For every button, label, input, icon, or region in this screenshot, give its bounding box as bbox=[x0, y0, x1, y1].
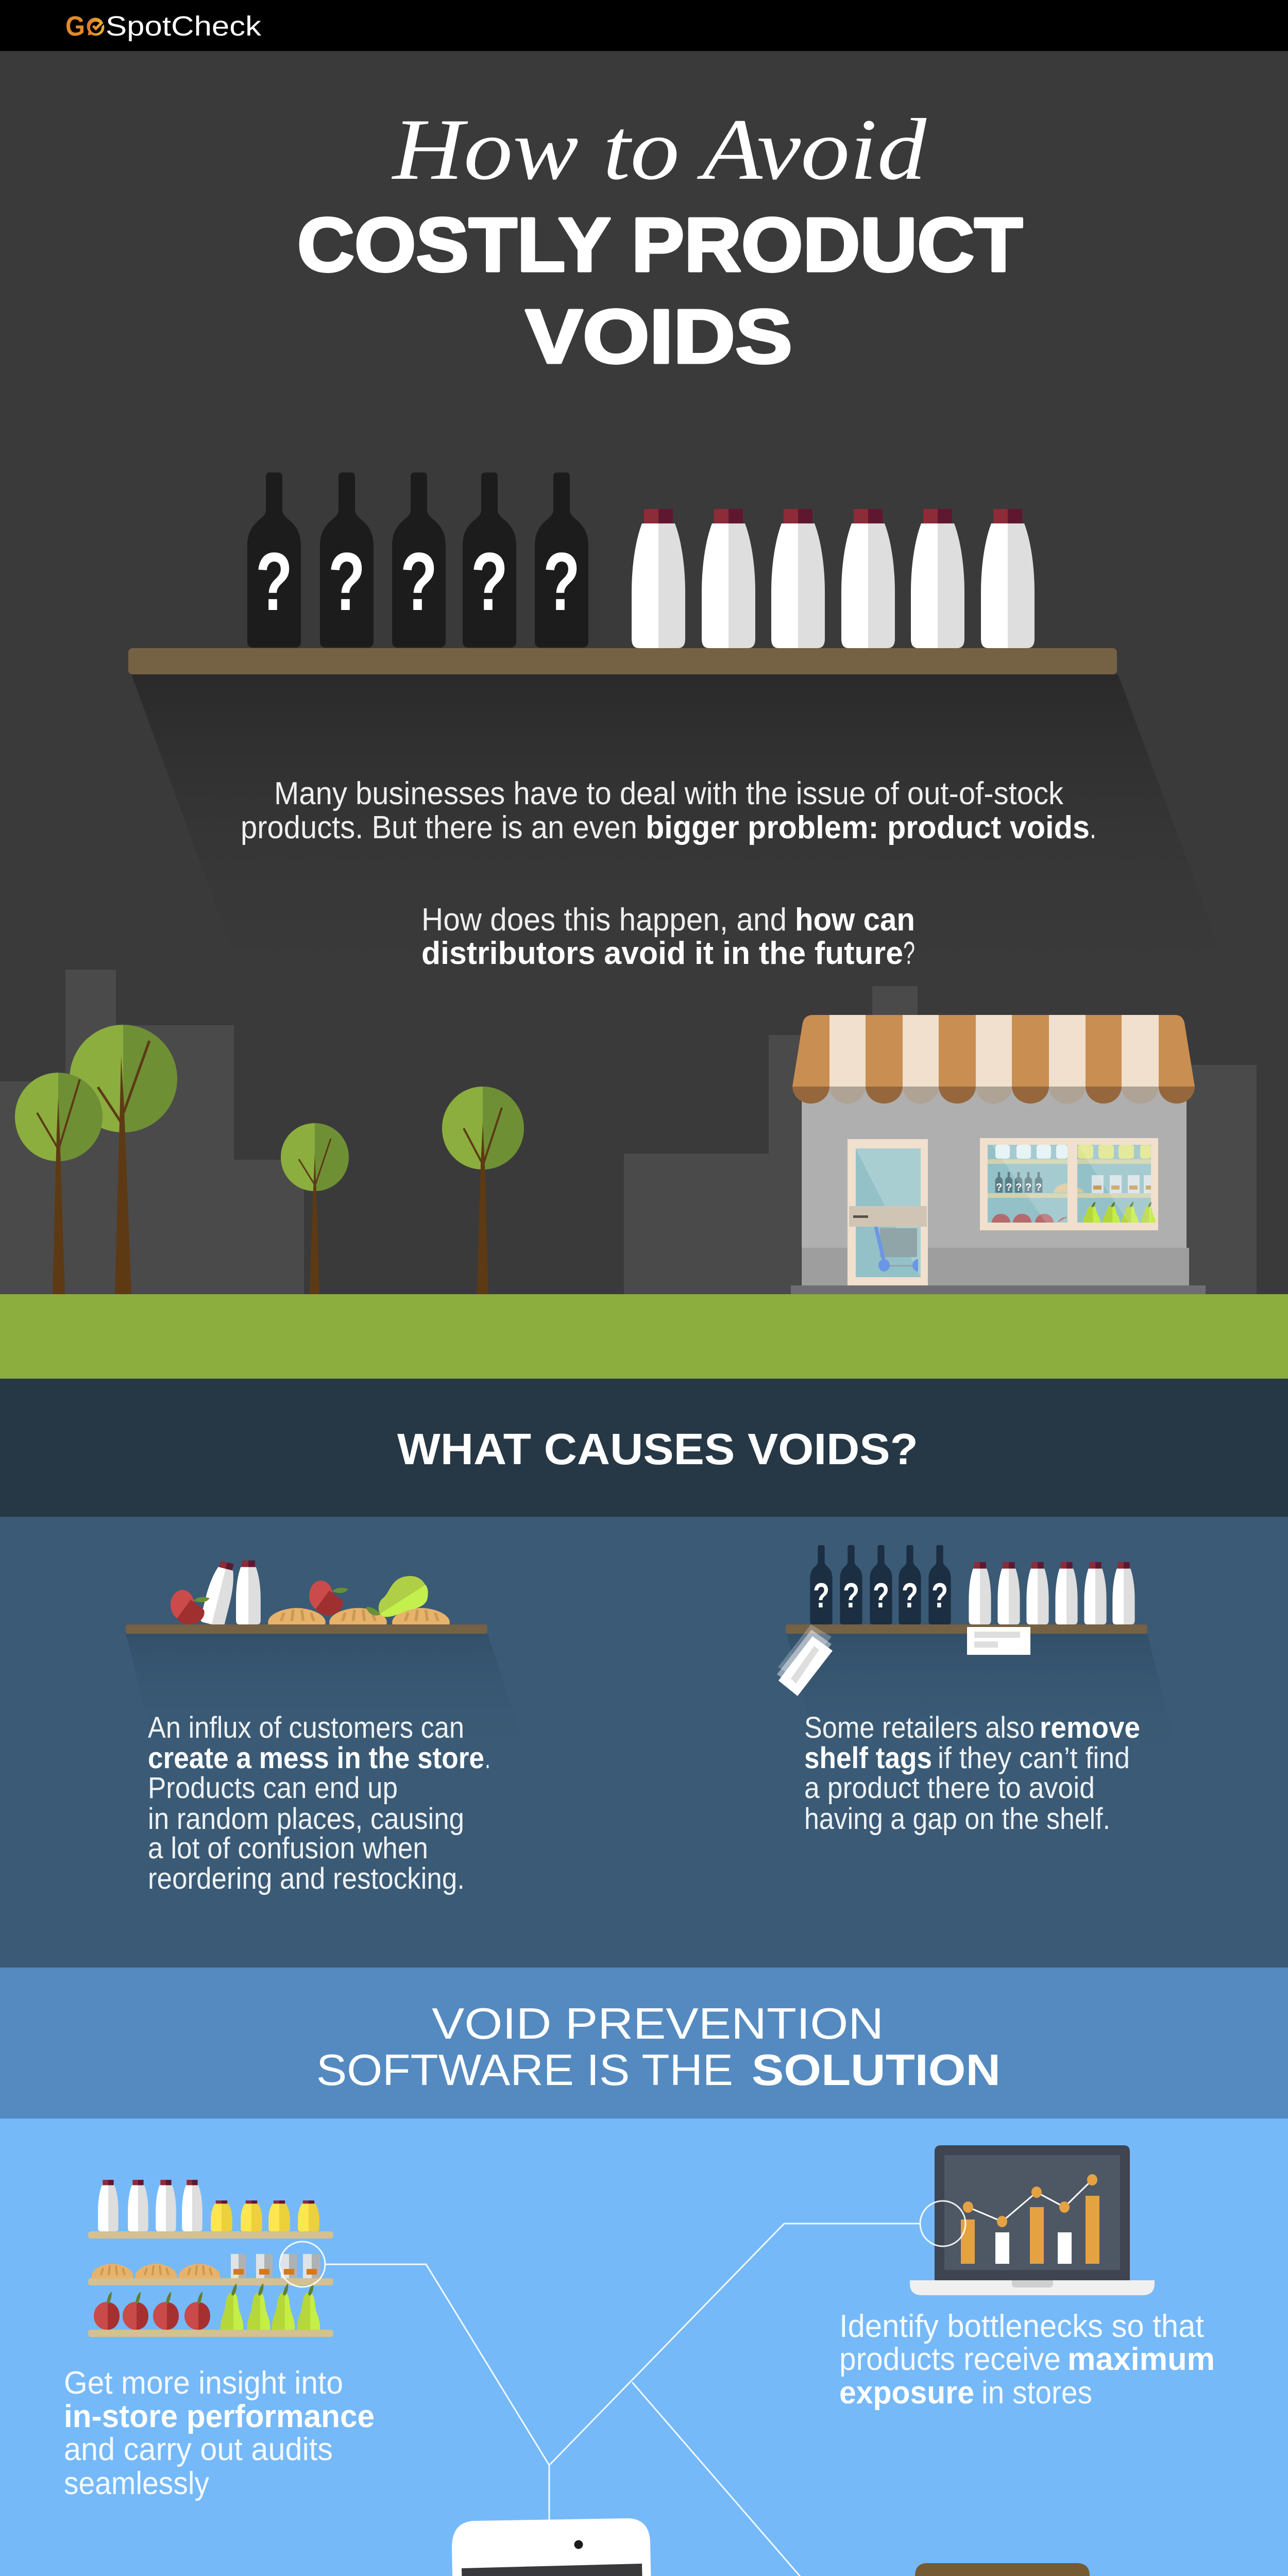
dark unknown bottles: ? bbox=[471, 535, 508, 628]
phone camera bbox=[574, 2540, 583, 2549]
phone bbox=[452, 2518, 658, 2576]
intro text: bigger problem: product voids bbox=[646, 810, 1090, 845]
intro text: Many businesses have to deal with the issue of out-of-stock bbox=[274, 776, 1064, 811]
city skyline bbox=[0, 970, 1257, 1294]
messy shelf items bbox=[171, 1560, 450, 1628]
hero shelf bbox=[128, 648, 1117, 674]
question text: How does this happen, and bbox=[421, 902, 787, 938]
exposure text bbox=[839, 2309, 1215, 2411]
dark unknown bottles: ? bbox=[256, 535, 293, 628]
left text: in random places, causing bbox=[148, 1802, 464, 1836]
panel: solution heading: VOID PREVENTION bbox=[432, 1999, 884, 2048]
panel: solution bbox=[0, 2119, 1288, 2576]
store window: ? bbox=[1015, 1182, 1022, 1193]
left text: Products can end up bbox=[148, 1771, 398, 1805]
exposure text: maximum bbox=[1067, 2342, 1215, 2377]
dark unknown bottles: ? bbox=[400, 535, 437, 628]
question text: how can bbox=[795, 902, 915, 938]
panel: solution heading: SOFTWARE IS THE bbox=[316, 2046, 733, 2095]
tree 3 bbox=[281, 1123, 349, 1294]
intro text bbox=[241, 776, 1096, 845]
intro text: . bbox=[1090, 810, 1096, 845]
right text: shelf tags bbox=[804, 1741, 932, 1775]
right shelf bottles: ? bbox=[931, 1576, 948, 1615]
question text: distributors avoid it in the future bbox=[421, 936, 903, 971]
tree 2 bbox=[70, 1025, 177, 1294]
dark unknown bottles: ? bbox=[328, 535, 365, 628]
right shelf shadow bbox=[787, 1634, 1180, 1762]
title bbox=[297, 101, 1023, 379]
dark unknown bottles: ? bbox=[543, 535, 580, 628]
exposure text: Identify bottlenecks so that bbox=[839, 2309, 1204, 2344]
top logo bar bbox=[0, 0, 1288, 51]
right shelf bottles: ? bbox=[902, 1576, 918, 1615]
right text bbox=[804, 1711, 1140, 1836]
left text: create a mess in the store bbox=[148, 1741, 484, 1775]
awning bbox=[792, 1015, 1195, 1104]
store shelves illustration bbox=[88, 2180, 333, 2337]
small logo wordmark: G bbox=[65, 11, 85, 42]
question text bbox=[421, 902, 915, 971]
right text: having a gap on the shelf. bbox=[804, 1802, 1110, 1836]
insight text: and carry out audits bbox=[64, 2432, 333, 2467]
left text: a lot of confusion when bbox=[148, 1832, 428, 1865]
phone screen bbox=[462, 2564, 649, 2576]
right shelf bottles bbox=[810, 1545, 1135, 1624]
storefront bbox=[791, 1015, 1206, 1294]
right text: Some retailers also bbox=[804, 1711, 1035, 1744]
title: How to Avoid bbox=[392, 101, 927, 198]
left text: reordering and restocking. bbox=[148, 1862, 465, 1895]
exposure text: in stores bbox=[981, 2375, 1092, 2411]
left text: . bbox=[485, 1741, 490, 1775]
right shelf bottles: ? bbox=[873, 1576, 889, 1615]
connector lines bbox=[280, 2201, 965, 2576]
insight text: in-store performance bbox=[64, 2399, 375, 2434]
title: COSTLY PRODUCT bbox=[297, 202, 1023, 287]
grass bbox=[0, 1294, 1288, 1379]
store window: ? bbox=[1006, 1182, 1012, 1193]
store window: ? bbox=[1036, 1182, 1042, 1193]
tree 1 bbox=[15, 1073, 103, 1294]
right shelf bottles: ? bbox=[813, 1576, 829, 1615]
store window: ? bbox=[996, 1182, 1002, 1193]
insight text bbox=[64, 2365, 375, 2501]
store door bbox=[848, 1139, 928, 1285]
panel: causes bbox=[0, 1517, 1288, 1968]
exposure text: exposure bbox=[839, 2375, 974, 2411]
tree 4 bbox=[442, 1087, 524, 1294]
shelf tag in place bbox=[967, 1627, 1030, 1655]
clipboard icon bbox=[915, 2563, 1090, 2576]
insight text: seamlessly bbox=[64, 2466, 209, 2501]
intro text: products. But there is an even bbox=[241, 810, 637, 845]
panel: what causes voids heading bbox=[0, 1379, 1288, 1517]
question text: ? bbox=[903, 936, 915, 971]
store window bbox=[980, 1138, 1158, 1230]
small logo wordmark: SpotCheck bbox=[106, 11, 262, 42]
panel: what causes voids heading: WHAT CAUSES VOIDS? bbox=[397, 1425, 918, 1474]
panel: solution heading bbox=[0, 1968, 1288, 2119]
falling shelf tag bbox=[777, 1624, 833, 1696]
store lower wall bbox=[802, 1248, 1189, 1285]
dark unknown bottles bbox=[247, 472, 588, 648]
insight text: Get more insight into bbox=[64, 2365, 343, 2401]
trees bbox=[15, 1025, 524, 1294]
title: VOIDS bbox=[526, 294, 792, 379]
window glass reflection bbox=[992, 1145, 1151, 1223]
right shelf bbox=[786, 1624, 1147, 1634]
store base bbox=[791, 1285, 1206, 1294]
small logo wordmark bbox=[65, 11, 262, 42]
exposure text: products receive bbox=[839, 2342, 1061, 2377]
panel: solution heading: SOLUTION bbox=[752, 2046, 1001, 2095]
right text: if they can’t find bbox=[938, 1741, 1130, 1775]
left text bbox=[148, 1711, 490, 1895]
panel: hero background bbox=[0, 51, 1288, 1294]
store window: ? bbox=[1025, 1182, 1031, 1193]
white bottles bbox=[632, 509, 1035, 648]
shelf shadow bbox=[131, 674, 1247, 1020]
left text: An influx of customers can bbox=[148, 1711, 464, 1744]
store wall bbox=[802, 1087, 1187, 1285]
left shelf bbox=[126, 1624, 487, 1634]
left shelf shadow bbox=[126, 1634, 527, 1752]
right text: remove bbox=[1040, 1711, 1140, 1744]
laptop chart icon bbox=[910, 2145, 1155, 2295]
right text: a product there to avoid bbox=[804, 1771, 1095, 1805]
right shelf bottles: ? bbox=[843, 1576, 859, 1615]
